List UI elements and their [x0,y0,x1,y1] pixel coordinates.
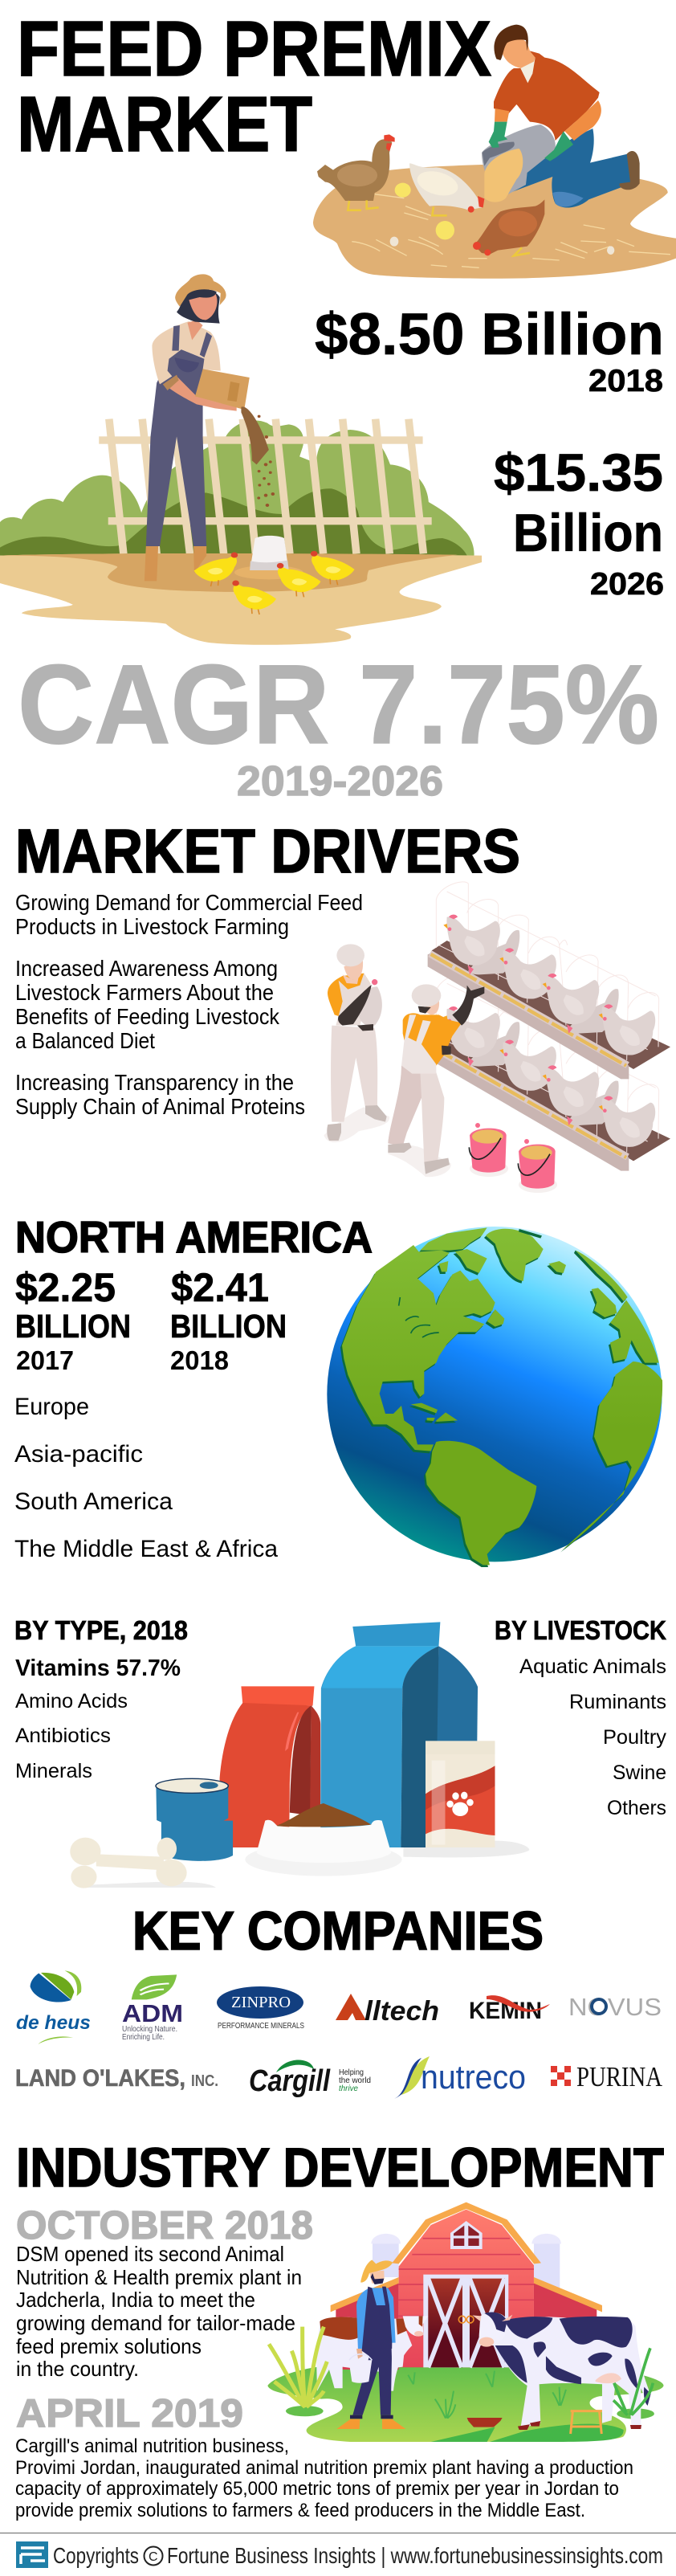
illustration: barn, farmer and cows [267,2202,664,2442]
market size 2026: Billion [513,503,663,562]
CAGR period: 2019-2026 [237,758,443,805]
text: market drivers list: Supply Chain of Animal Proteins [15,1094,305,1119]
text: october 2018 development: growing demand for tailor-made [16,2311,295,2335]
text: october 2018 development: DSM opened its second Animal [16,2242,284,2266]
logo: Cargill [249,2060,371,2098]
north america 2017 value: 2017 [16,1345,74,1375]
text: april 2019 development: provide premix solutions to farmers & feed producers in the Middle East. [15,2500,585,2521]
market size 2018: 2018 [588,364,663,398]
text: by livestock list: Others [607,1797,666,1819]
logo: Land O'Lakes: LAND O'LAKES, [15,2065,185,2092]
text: market drivers list: a Balanced Diet [15,1028,155,1053]
text: market drivers list: Growing Demand for Commercial Feed [15,890,363,915]
footer: logo and copyright: Copyrights [53,2543,139,2568]
text: april 2019 development: Cargill's animal nutrition business, [15,2435,289,2457]
market size 2018 [315,302,664,398]
text: market drivers list: Products in Livestock Farming [15,914,289,939]
illustration: globe [327,1227,662,1567]
title: FEED PREMIX [17,5,491,92]
market size 2026 [494,443,664,602]
icon: Fortune Business Insights logo [16,2541,48,2568]
text: april 2019 development: capacity of approximately 65,000 metric tons of premix per year in Jordan to [15,2478,619,2500]
text: by type list: Vitamins 57.7% [15,1655,181,1681]
heading: north america: NORTH AMERICA [15,1212,373,1262]
logo: Nutreco [394,2056,526,2099]
north america 2018 value: $2.41 [171,1265,269,1310]
text: other regions: The Middle East & Africa [14,1536,278,1562]
text: october 2018 development: Jadcherla, India to meet the [16,2288,255,2312]
north america 2018 value: 2018 [170,1345,229,1375]
title: MARKET [17,80,312,168]
text: april 2019 development [15,2435,633,2521]
market size 2026: $15.35 [494,443,663,502]
text: other regions: South America [14,1488,173,1515]
logo: de heus: de heus [16,2012,91,2034]
logo: Land O'Lakes: INC. [191,2072,218,2090]
text: by type list [15,1655,181,1782]
logo: Alltech: lltech [364,1996,439,2027]
heading: market drivers: MARKET DRIVERS [15,817,520,886]
text: october 2018 development: feed premix solutions [16,2334,202,2358]
illustration: animal feed products [70,1622,529,1888]
logo: ADM: Enriching Life. [122,2033,165,2042]
text: by livestock list: Aquatic Animals [519,1655,666,1678]
logo: Zinpro [217,1986,304,2031]
text: market drivers list: Increasing Transparency in the [15,1070,294,1095]
text: october 2018 development [16,2242,302,2381]
text: october 2018 development: in the country. [16,2357,139,2381]
logo: Cargill: thrive [339,2084,358,2093]
footer: logo and copyright: C [149,2550,158,2564]
illustration: poultry cages and workers [324,882,670,1193]
north america 2017 value [15,1265,131,1375]
text: by livestock list: Ruminants [569,1691,666,1713]
heading: october 2018: OCTOBER 2018 [16,2204,313,2247]
logo: Zinpro: PERFORMANCE MINERALS [218,2021,304,2031]
logo: Kemin: KEMIN [469,1998,542,2024]
text: market drivers list: Increased Awareness Among [15,956,278,981]
logo: Cargill: the world [339,2076,371,2085]
text: by type list: Antibiotics [15,1725,111,1747]
logo: Cargill: Helping [339,2068,364,2077]
logo: Alltech [336,1994,439,2027]
text: other regions: Asia-pacific [14,1441,143,1468]
text: market drivers list [15,890,363,1119]
illustration: woman feeding chicks at fence [0,274,482,645]
logo: Zinpro: ZINPRO [231,1994,291,2011]
text: by type list: Amino Acids [15,1690,128,1713]
market size 2018: $8.50 Billion [315,302,664,367]
logo: Cargill: Cargill [249,2064,331,2098]
heading: by type: BY TYPE, 2018 [14,1615,188,1645]
heading: april 2019: APRIL 2019 [16,2392,243,2435]
illustration: farmer pouring feed for chickens [313,25,676,279]
north america 2017 value: BILLION [15,1308,131,1345]
market size 2026: 2026 [590,567,664,602]
logo: de heus [16,1970,91,2044]
text: by livestock list [519,1655,667,1819]
heading: key companies: KEY COMPANIES [132,1900,544,1962]
title [17,5,491,168]
north america 2017 value: $2.25 [15,1265,116,1310]
text: other regions: Europe [14,1394,89,1420]
text: market drivers list: Benefits of Feeding Livestock [15,1004,280,1029]
text: october 2018 development: Nutrition & Health premix plant in [16,2265,302,2289]
logo: ADM: Unlocking Nature. [122,2025,177,2034]
north america 2018 value [170,1265,287,1375]
text: by livestock list: Poultry [603,1726,667,1749]
logo: Novus: NOVUS [568,1993,662,2021]
text: april 2019 development: Provimi Jordan, inaugurated animal nutrition premix plant having a production [15,2457,633,2479]
logo: Purina [551,2061,663,2092]
north america 2018 value: BILLION [170,1308,287,1345]
text: by livestock list: Swine [613,1762,666,1784]
logo: ADM [122,1974,183,2042]
text: market drivers list: Livestock Farmers About the [15,980,274,1005]
logo: ADM: ADM [122,1999,183,2027]
text: by type list: Minerals [15,1760,92,1782]
logo: Nutreco: nutreco [421,2058,526,2096]
text: other regions [14,1394,278,1562]
